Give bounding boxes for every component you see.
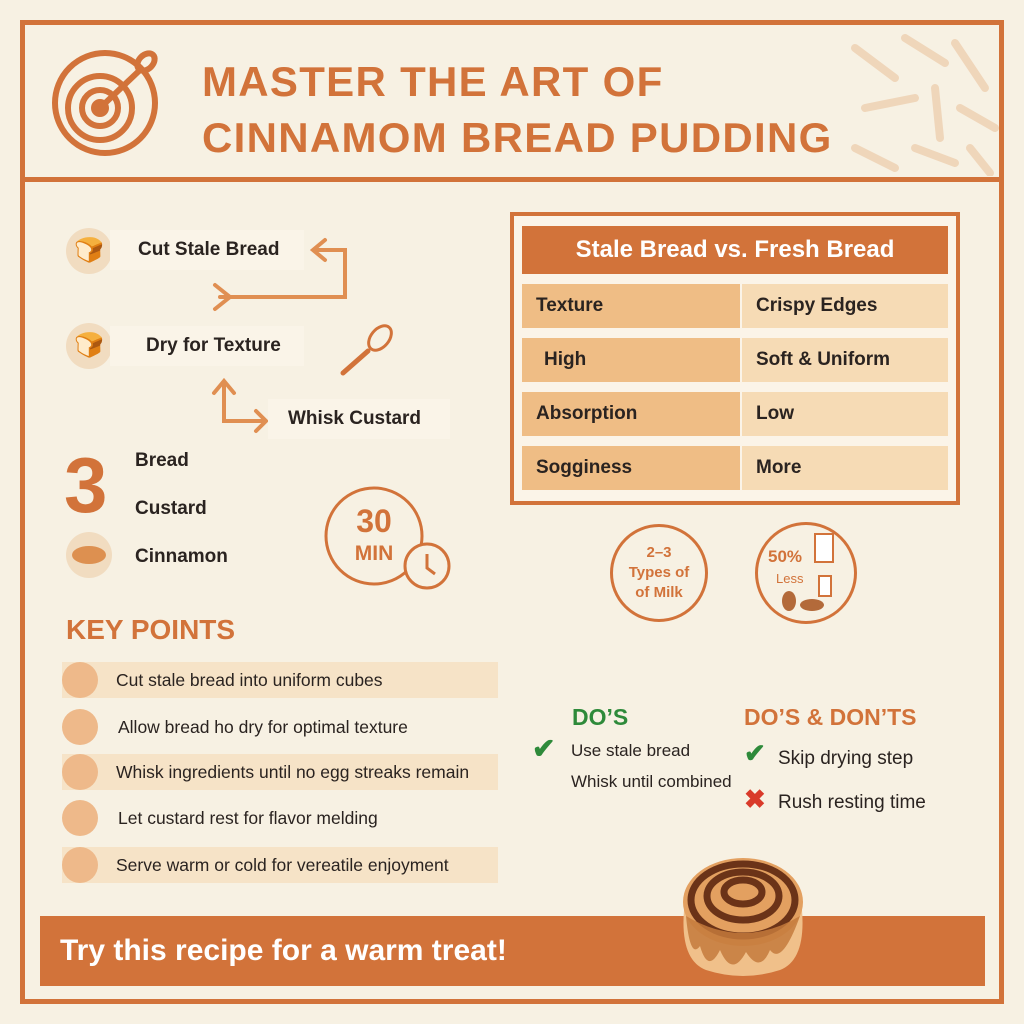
title: CINNAMOM BREAD PUDDING — [202, 114, 833, 161]
do's — [532, 704, 732, 791]
step: whisk custard — [268, 399, 450, 439]
timer: 30 min: MIN — [355, 542, 393, 565]
step: dry for texture: 🍞 — [74, 332, 104, 359]
ingredient count: Bread — [135, 450, 189, 471]
title: MASTER THE ART OF — [202, 58, 664, 105]
do's: DO’S — [572, 704, 628, 730]
title — [202, 58, 833, 161]
step: cut stale bread: 🍞 — [74, 237, 104, 264]
do's & don'ts: ✖ — [744, 784, 766, 814]
key points list: Let custard rest for flavor melding — [118, 808, 378, 828]
key points list: Whisk ingredients until no egg streaks remain — [116, 762, 469, 782]
stat: 50% less — [755, 522, 857, 624]
do's: ✔ — [532, 733, 555, 764]
arrow: loop — [212, 238, 347, 312]
illustration: cinnamon roll — [683, 858, 803, 976]
footer banner: Try this recipe for a warm treat! — [60, 934, 507, 967]
step: whisk custard: Whisk Custard — [288, 408, 421, 429]
comparison table: Absorption — [536, 403, 637, 424]
comparison table: Sogginess — [536, 457, 632, 478]
stat: milk types — [610, 524, 708, 622]
comparison table: More — [756, 457, 801, 478]
key points list: Cut stale bread into uniform cubes — [116, 670, 383, 690]
footer banner — [40, 916, 985, 986]
key points list: Serve warm or cold for vereatile enjoyment — [116, 855, 449, 875]
step: cut stale bread — [66, 228, 279, 274]
do's & don'ts: Rush resting time — [778, 792, 926, 813]
stat: milk types: Types of — [629, 564, 689, 581]
comparison table: Soft & Uniform — [756, 349, 890, 370]
do's: Whisk until combined — [571, 772, 732, 791]
do's: Use stale bread — [571, 741, 690, 760]
arrow: corner — [212, 378, 268, 434]
step: dry for texture: Dry for Texture — [146, 335, 281, 356]
ingredient count: Custard — [135, 498, 207, 519]
comparison table: Texture — [536, 295, 603, 316]
do's & don'ts: ✔ — [744, 738, 766, 768]
step: cut stale bread: Cut Stale Bread — [138, 239, 279, 260]
timer: 30 min — [324, 486, 450, 590]
comparison table: Crispy Edges — [756, 295, 877, 316]
stat: 50% less: Less — [776, 571, 803, 586]
icon: target whisk logo — [52, 50, 158, 156]
ingredient count: Cinnamon — [135, 546, 228, 567]
key points list: Allow bread ho dry for optimal texture — [118, 717, 408, 737]
key points list — [62, 662, 498, 883]
comparison table: Low — [756, 403, 794, 424]
heading: key points: KEY POINTS — [66, 614, 235, 645]
decorative cinnamon sticks — [851, 34, 999, 176]
ingredient count: 3 — [64, 441, 107, 529]
step: dry for texture — [66, 323, 281, 369]
timer: 30 min: 30 — [356, 503, 392, 539]
stat: milk types: 2–3 — [646, 544, 672, 561]
comparison table — [510, 212, 960, 505]
do's & don'ts: DO’S & DON’TS — [744, 704, 917, 730]
comparison table: High — [544, 349, 586, 370]
stat: 50% less: 50% — [768, 547, 802, 566]
icon: whisk — [340, 324, 393, 376]
ingredient count — [64, 441, 228, 578]
do's & don'ts: Skip drying step — [778, 748, 913, 769]
do's & don'ts — [744, 704, 926, 814]
comparison table: Stale Bread vs. Fresh Bread — [576, 236, 894, 263]
stat: milk types: of Milk — [635, 584, 683, 601]
